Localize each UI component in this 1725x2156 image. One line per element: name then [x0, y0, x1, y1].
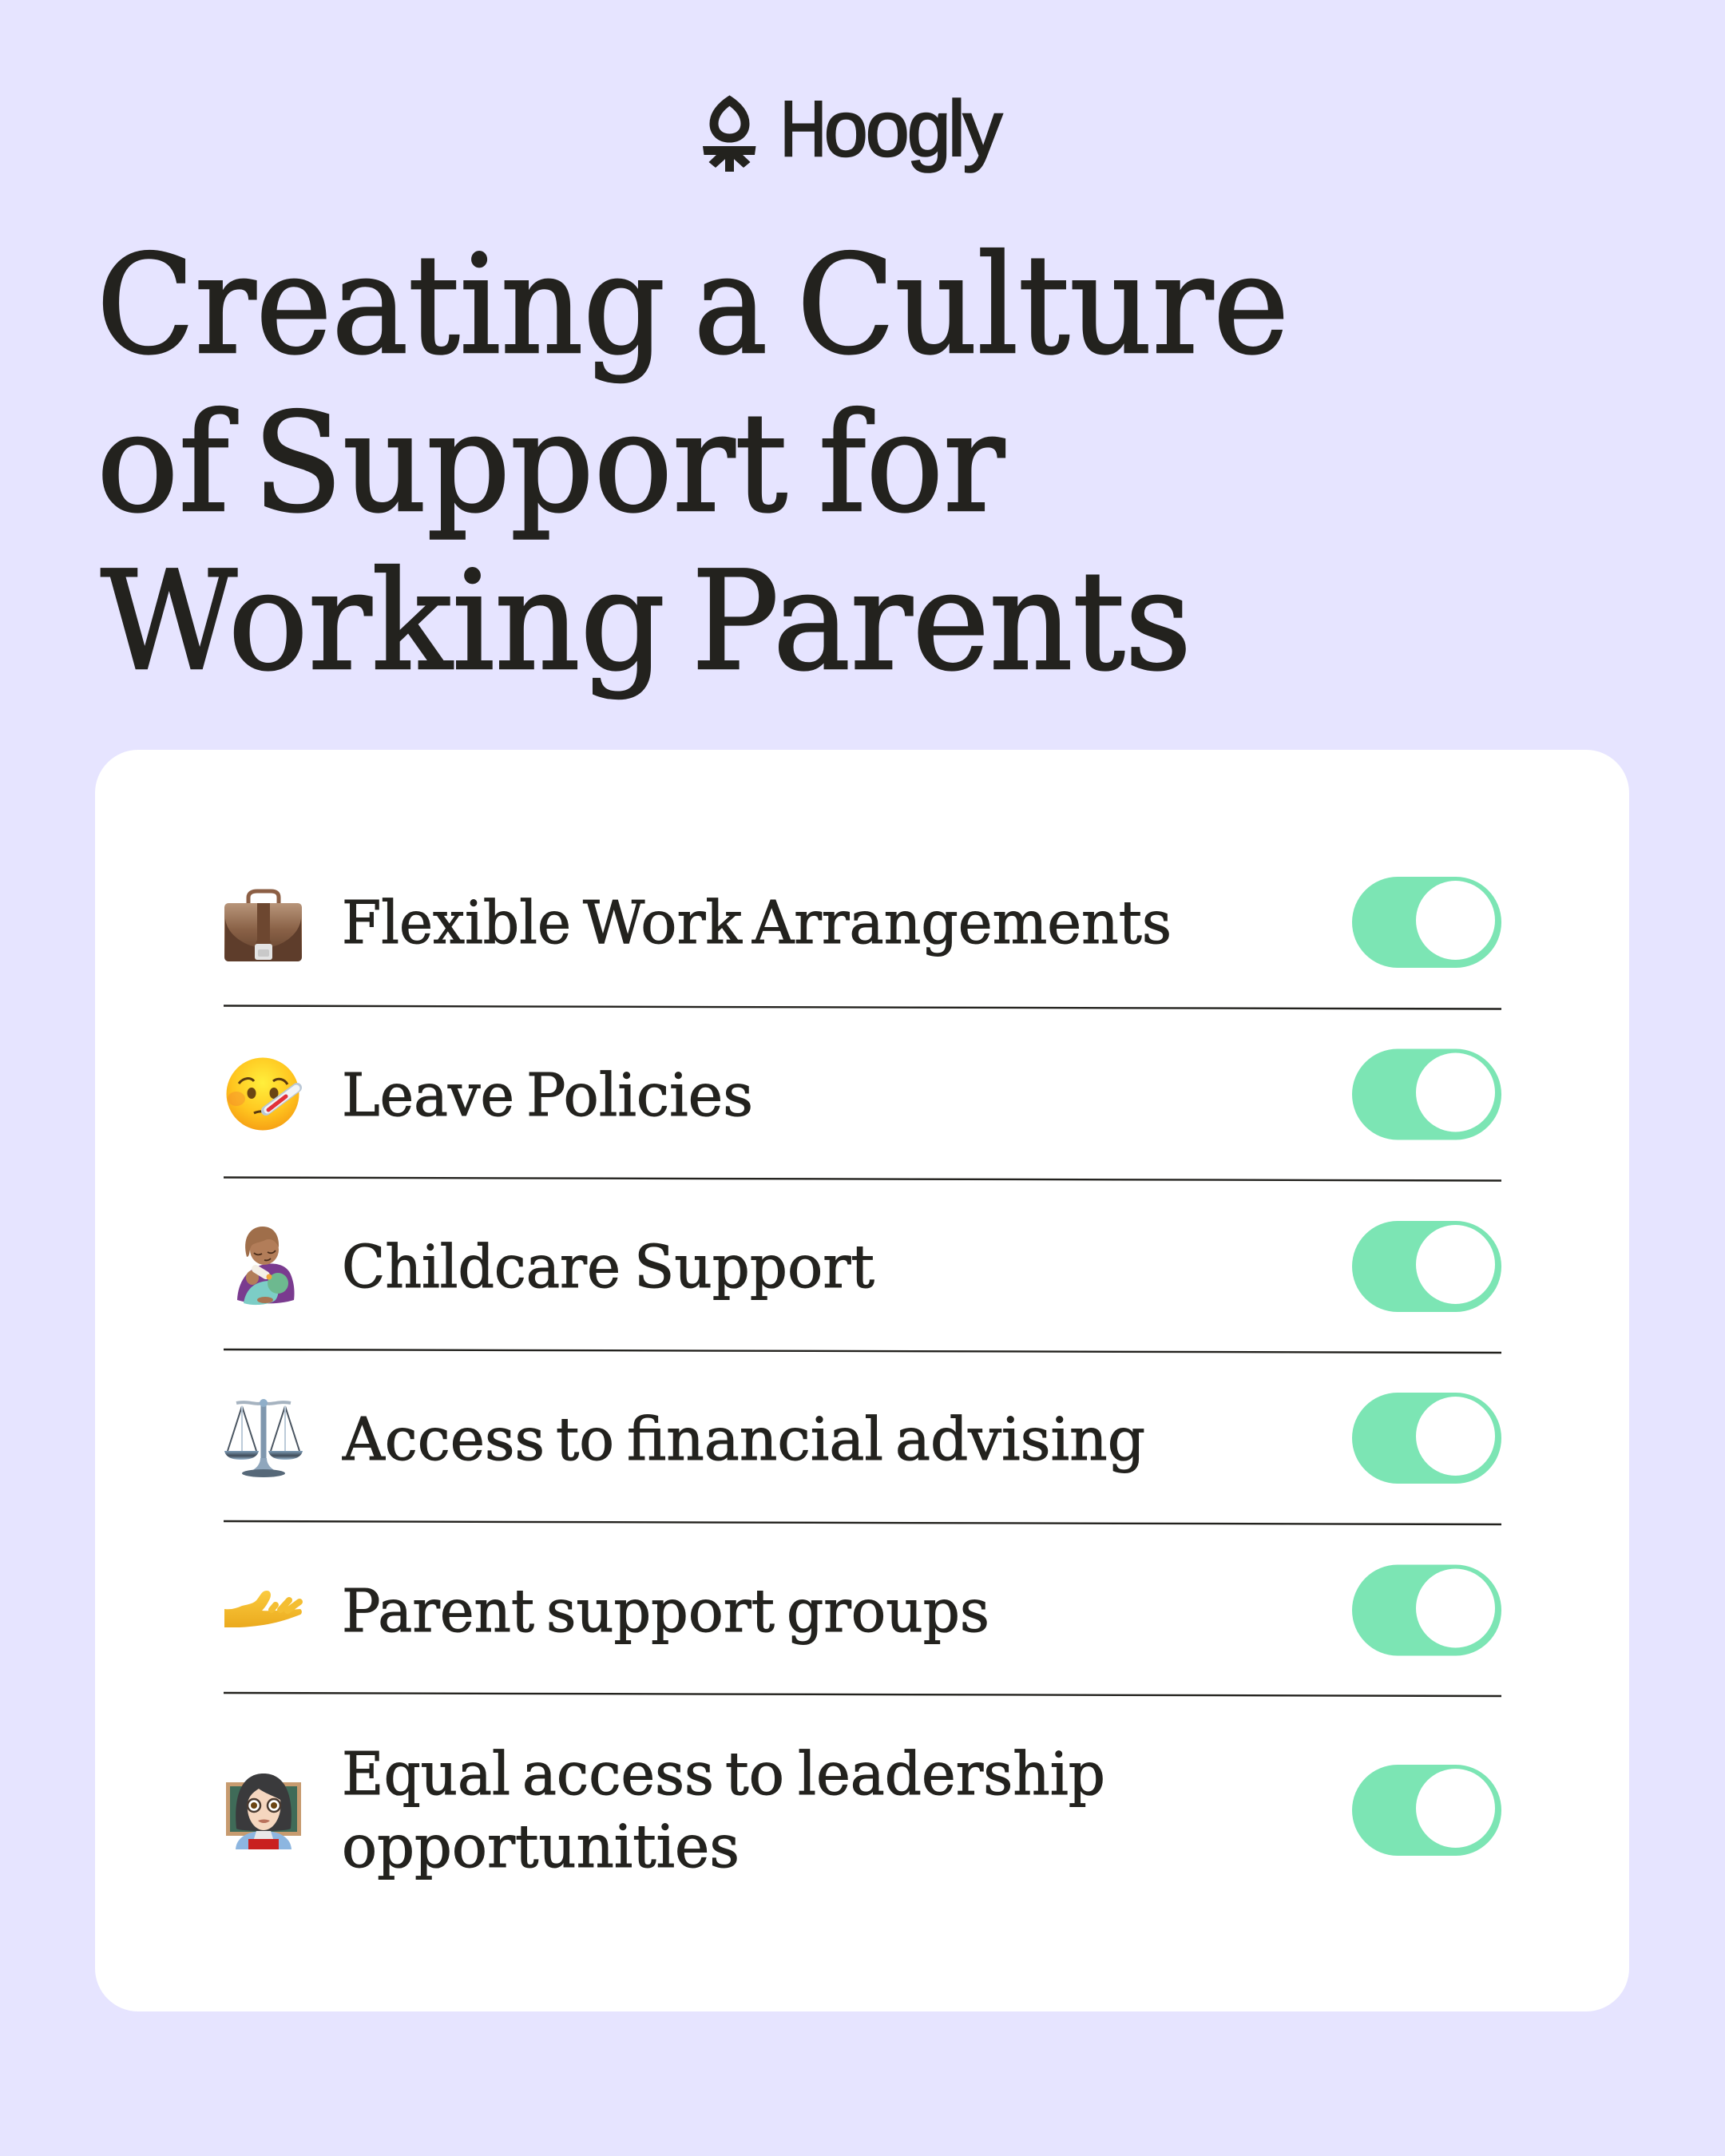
- title: a: [694, 226, 767, 385]
- toggle: [1352, 1049, 1501, 1140]
- label: [342, 1061, 753, 1130]
- label: [342, 1233, 874, 1302]
- row: Access to financial advising: [224, 1393, 1501, 1484]
- label: to: [556, 1405, 614, 1474]
- label: support: [546, 1577, 775, 1646]
- label: Access: [342, 1405, 545, 1474]
- title: Parents: [692, 542, 1192, 701]
- toggle: [1352, 1393, 1501, 1484]
- divider: [224, 1349, 1501, 1353]
- icon: person feeding baby: [237, 1227, 295, 1305]
- panel: checklist card: [95, 750, 1629, 2011]
- icon: face with thermometer: [227, 1057, 299, 1131]
- label: to: [725, 1740, 784, 1809]
- row: Equal access to leadership opportunities: [226, 1740, 1501, 1881]
- icon: flame logo mark: [703, 101, 755, 172]
- row: Leave Policies: [227, 1049, 1501, 1140]
- label: opportunities: [342, 1813, 740, 1881]
- divider: [224, 1693, 1501, 1696]
- toggle: [1352, 1221, 1501, 1312]
- divider: [224, 1521, 1501, 1524]
- row: Parent support groups: [224, 1565, 1501, 1656]
- label: Work: [583, 889, 743, 957]
- toggle: [1352, 1565, 1501, 1656]
- label: Support: [634, 1233, 874, 1302]
- logo: Hoogly: [703, 85, 1002, 172]
- label: Leave: [342, 1061, 514, 1130]
- label: Childcare: [342, 1233, 621, 1302]
- title: Support: [253, 384, 787, 543]
- divider: [224, 1177, 1501, 1180]
- icon: briefcase: [224, 891, 302, 961]
- label: Parent: [342, 1577, 534, 1646]
- label: [342, 1740, 1105, 1881]
- label: advising: [895, 1405, 1145, 1474]
- row: Childcare Support: [237, 1221, 1501, 1312]
- title: Culture: [797, 226, 1289, 385]
- label: leadership: [798, 1740, 1105, 1809]
- icon: teacher: [226, 1774, 301, 1849]
- label: [342, 1577, 989, 1646]
- label: Equal: [342, 1740, 510, 1809]
- title: Working: [101, 542, 665, 701]
- label: groups: [787, 1577, 989, 1646]
- label: Flexible: [342, 889, 571, 957]
- toggle: [1352, 877, 1501, 968]
- icon: balance scale: [224, 1399, 303, 1477]
- wordmark: H: [780, 85, 827, 172]
- wordmark: oogly: [824, 85, 1002, 172]
- divider: [224, 1006, 1501, 1009]
- title: Creating: [97, 226, 665, 385]
- toggle: [1352, 1765, 1501, 1856]
- title: [97, 226, 1289, 701]
- label: access: [522, 1740, 714, 1809]
- label: [342, 889, 1172, 957]
- label: Policies: [526, 1061, 753, 1130]
- title: of: [97, 384, 238, 543]
- label: [342, 1405, 1145, 1474]
- label: financial: [627, 1405, 883, 1474]
- label: Arrangements: [751, 889, 1172, 957]
- row: Flexible Work Arrangements: [224, 877, 1501, 968]
- icon: open palm hand: [224, 1591, 302, 1627]
- title: for: [819, 384, 1005, 543]
